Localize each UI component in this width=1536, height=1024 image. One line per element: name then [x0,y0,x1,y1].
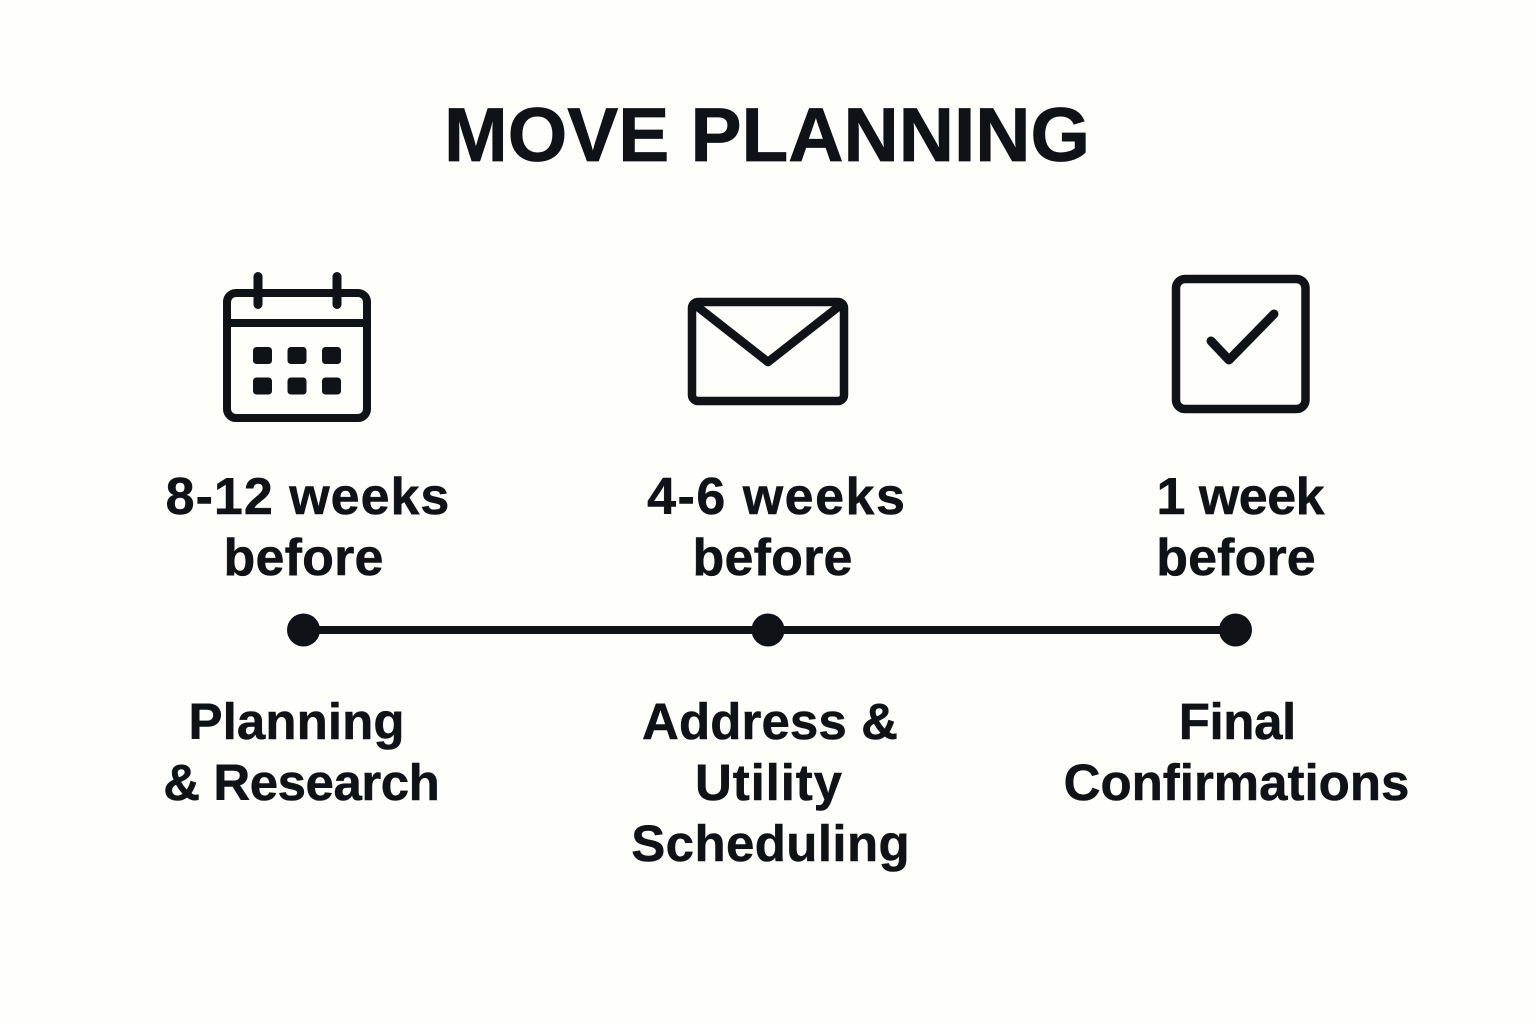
timing label: 4-6 weeks before [647,468,906,587]
step label: Final Confirmations: Final [1179,693,1296,750]
step label: Address & Utility Scheduling: Utility [695,754,843,811]
timing label: 1 week before [1156,468,1325,587]
timing label: 8-12 weeks before: 8-12 weeks [166,468,450,526]
timing label: 8-12 weeks before: before [224,529,384,587]
step label: Address & Utility Scheduling [631,693,910,872]
icon: envelope [692,302,844,401]
step label: Address & Utility Scheduling: Address & [642,693,898,750]
timing label: 1 week before: 1 week [1156,468,1324,526]
step label: Planning & Research: Planning [188,693,405,750]
step label: Final Confirmations: Confirmations [1064,754,1409,811]
timing label: 1 week before: before [1156,529,1316,587]
timing label: 4-6 weeks before: 4-6 weeks [647,468,906,526]
icon: calendar [227,276,367,418]
icon: checkbox [1176,279,1306,409]
step label: Planning & Research: & Research [163,754,439,811]
timing label: 8-12 weeks before [166,468,450,587]
timing label: 4-6 weeks before: before [693,529,853,587]
step label: Address & Utility Scheduling: Scheduling [631,815,910,872]
timeline [287,614,1252,646]
step label: Final Confirmations [1064,693,1409,811]
step label: Planning & Research [163,693,439,811]
title: MOVE PLANNING [444,93,1090,178]
